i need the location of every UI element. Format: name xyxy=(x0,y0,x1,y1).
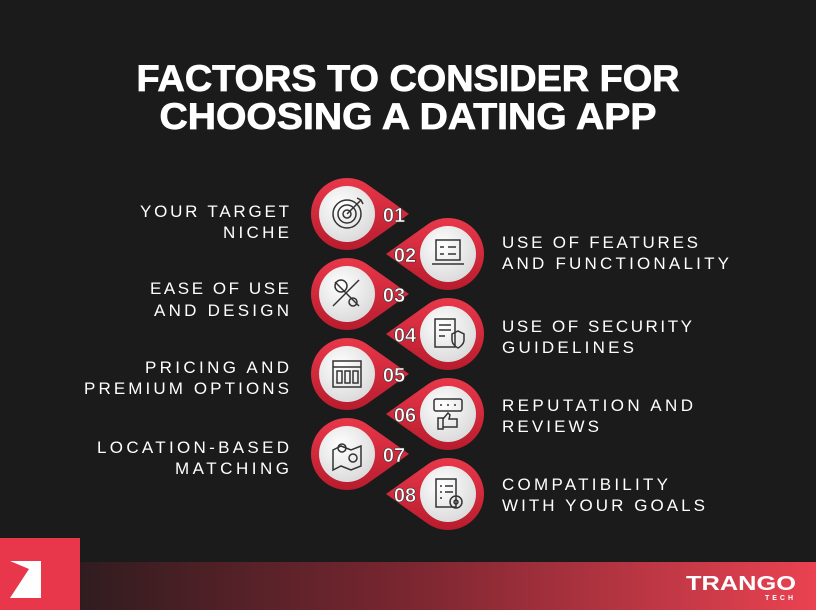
title xyxy=(136,58,680,137)
icon: document shield xyxy=(435,319,464,348)
left labels: AND DESIGN xyxy=(154,301,289,320)
left labels: YOUR TARGET xyxy=(140,202,289,221)
logo square xyxy=(0,538,80,610)
right labels: REPUTATION AND xyxy=(502,396,693,415)
right labels xyxy=(502,233,729,515)
icon: checklist target xyxy=(436,479,462,508)
right labels: WITH YOUR GOALS xyxy=(502,496,705,515)
drop 03 xyxy=(311,258,409,330)
drop 07 xyxy=(311,418,409,490)
brand xyxy=(686,573,796,602)
brand: TRANGO xyxy=(686,573,796,595)
right labels: GUIDELINES xyxy=(502,338,634,357)
right labels: COMPATIBILITY xyxy=(502,475,668,494)
icon: design tools xyxy=(333,280,359,306)
right labels: USE OF FEATURES xyxy=(502,233,698,252)
drop 04: 04 xyxy=(394,325,417,347)
left labels: PREMIUM OPTIONS xyxy=(84,379,289,398)
left labels: NICHE xyxy=(223,223,289,242)
left labels: LOCATION-BASED xyxy=(97,438,289,457)
icon: pricing table xyxy=(333,361,361,387)
title: CHOOSING A DATING APP xyxy=(160,96,656,137)
icon: target xyxy=(333,198,363,228)
drop 02: 02 xyxy=(394,245,416,267)
left labels: EASE OF USE xyxy=(150,279,289,298)
right labels: AND FUNCTIONALITY xyxy=(502,254,729,273)
drop 07: 07 xyxy=(383,445,405,467)
footer bar xyxy=(0,562,816,610)
brand: TECH xyxy=(765,595,796,602)
icon: map pins xyxy=(333,444,361,470)
drop 03: 03 xyxy=(383,285,405,307)
drop 05 xyxy=(311,338,409,410)
drop 08 xyxy=(386,458,484,530)
icon: laptop form xyxy=(432,240,464,264)
left labels: MATCHING xyxy=(175,459,289,478)
right labels: REVIEWS xyxy=(502,417,599,436)
drop 06: 06 xyxy=(394,405,416,427)
drop 01 xyxy=(311,178,409,250)
drop 01: 01 xyxy=(383,205,405,227)
icon: thumbs up review xyxy=(434,399,462,429)
right labels: USE OF SECURITY xyxy=(502,317,692,336)
drop 04 xyxy=(386,298,484,370)
drop 06 xyxy=(386,378,484,450)
drop 08: 08 xyxy=(394,485,416,507)
title: FACTORS TO CONSIDER FOR xyxy=(136,58,680,99)
left labels: PRICING AND xyxy=(145,358,289,377)
drop 05: 05 xyxy=(383,365,405,387)
drop 02 xyxy=(386,218,484,290)
left labels xyxy=(84,202,289,478)
